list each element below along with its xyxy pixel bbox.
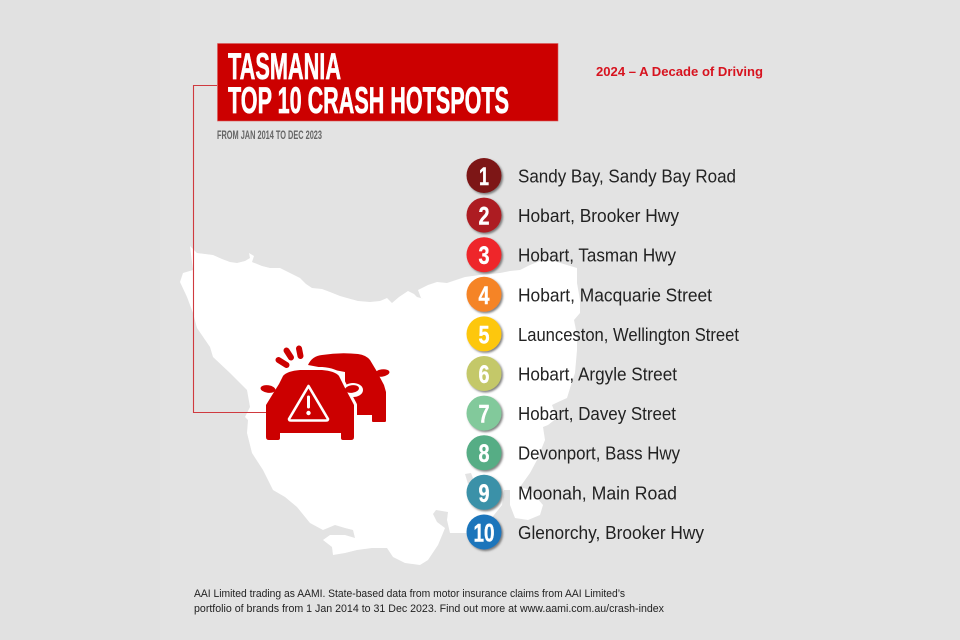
item 10: 10: [474, 520, 494, 548]
ranked list of hotspots: [466, 158, 739, 550]
footer: source note: portfolio of brands from 1 Jan 2014 to 31 Dec 2023. Find out more at www.aami.com.au/crash-index: [194, 603, 664, 615]
item 9: [466, 475, 677, 510]
item 2: 2: [478, 203, 490, 231]
item 2: [466, 198, 679, 233]
item 3: 3: [478, 242, 490, 270]
white halo between cars: [318, 367, 363, 415]
item 7: 7: [478, 401, 490, 429]
subtitle: date range: FROM JAN 2014 TO DEC 2023: [217, 130, 322, 142]
item 9: Moonah, Main Road: [518, 483, 677, 503]
tagline: 2024 – A Decade of Driving: [596, 64, 763, 79]
item 5: 5: [478, 321, 490, 349]
item 1: Sandy Bay, Sandy Bay Road: [518, 166, 736, 186]
item 1: [466, 158, 736, 193]
icon: two cars with warning sign: [260, 348, 390, 440]
item 2: Hobart, Brooker Hwy: [518, 206, 679, 226]
alert dashes: [278, 348, 300, 365]
item 6: Hobart, Argyle Street: [518, 364, 677, 384]
item 5: Launceston, Wellington Street: [518, 325, 739, 345]
item 7: [466, 396, 676, 431]
footer: source note: AAI Limited trading as AAMI. State-based data from motor insurance claims from AAI Limited’s: [194, 588, 625, 600]
item 4: Hobart, Macquarie Street: [518, 285, 712, 305]
front car: [260, 370, 359, 440]
item 10: [466, 514, 704, 550]
map: Tasmania silhouette: [180, 246, 580, 565]
item 10: Glenorchy, Brooker Hwy: [518, 523, 704, 543]
title banner: [218, 44, 558, 121]
item 3: Hobart, Tasman Hwy: [518, 246, 676, 266]
title banner: TASMANIA: [228, 46, 341, 87]
item 4: [466, 277, 712, 312]
item 8: 8: [478, 440, 490, 468]
warning triangle: [289, 386, 328, 420]
item 1: 1: [479, 163, 489, 191]
item 7: Hobart, Davey Street: [518, 404, 676, 424]
item 4: 4: [478, 282, 490, 310]
footer: source note: [194, 588, 664, 615]
item 9: 9: [478, 480, 490, 508]
title banner: TOP 10 CRASH HOTSPOTS: [228, 80, 509, 121]
item 6: [466, 356, 677, 391]
item 5: [466, 316, 739, 351]
back car: [308, 353, 390, 422]
item 3: [466, 237, 676, 272]
item 8: [466, 435, 680, 470]
connector line from title to car icon: [194, 86, 267, 412]
item 6: 6: [478, 361, 490, 389]
item 8: Devonport, Bass Hwy: [518, 444, 680, 464]
